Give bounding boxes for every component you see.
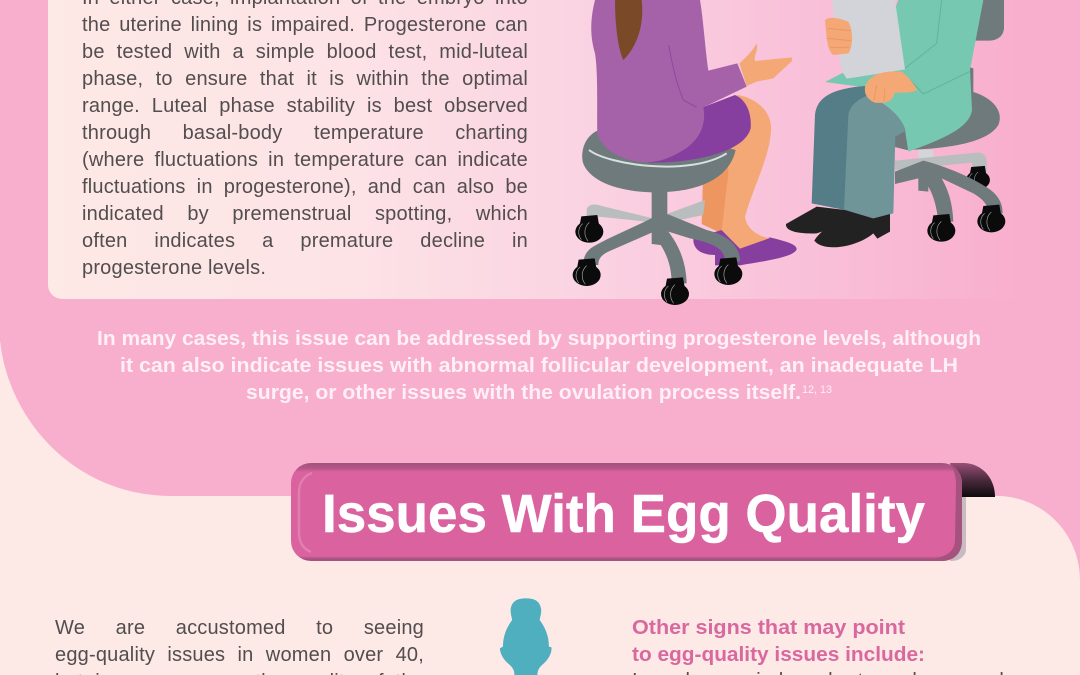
- heading: other signs: to egg-quality issues include:: [632, 644, 925, 666]
- text block: progesterone testing: progesterone levels.: [82, 257, 266, 279]
- text block: progesterone testing: often indicates a premature decline in: [82, 230, 528, 252]
- callout: progesterone summary: In many cases, this issue can be addressed by supporting progesterone levels, although: [97, 328, 981, 350]
- callout: progesterone summary: surge, or other issues with the ovulation process itself.: [246, 382, 801, 404]
- patient legs and shoe: [693, 95, 797, 265]
- text block: progesterone testing: [82, 0, 528, 279]
- text block: progesterone testing: phase, to ensure that it is within the optimal: [82, 68, 528, 90]
- patient body: [591, 0, 792, 163]
- text block: egg quality intro: egg-quality issues in women over 40,: [55, 644, 424, 666]
- panel: progesterone text card: [48, 0, 931, 299]
- text block: progesterone testing: the uterine lining is impaired. Progesterone can: [82, 14, 528, 36]
- callout: progesterone summary: [97, 328, 981, 404]
- text block: progesterone testing: through basal-body temperature charting: [82, 122, 528, 144]
- stool base and casters: [573, 214, 742, 305]
- callout: progesterone summary: 12, 13: [802, 384, 832, 396]
- text block: egg quality intro: We are accustomed to seeing: [55, 617, 424, 639]
- heading banner: Issues With Egg Quality: Issues With Egg Quality: [322, 484, 925, 544]
- doctor's chair: [893, 0, 1005, 242]
- callout: progesterone summary: it can also indicate issues with abnormal follicular development, an inadequate LH: [120, 355, 958, 377]
- text block: progesterone testing: range. Luteal phase stability is best observed: [82, 95, 528, 117]
- patient's stool: [575, 131, 736, 243]
- text block: progesterone testing: (where fluctuations in temperature can indicate: [82, 149, 528, 171]
- heading: other signs: Other signs that may point: [632, 617, 905, 639]
- text block: progesterone testing: indicated by premenstrual spotting, which: [82, 203, 528, 225]
- illustration: patient and doctor consultation: [572, 0, 1006, 305]
- text block: progesterone testing: be tested with a simple blood test, mid-luteal: [82, 41, 528, 63]
- doctor: [786, 0, 983, 247]
- text block: progesterone testing: fluctuations in progesterone), and can also be: [82, 176, 528, 198]
- text block: egg quality intro: [55, 617, 424, 675]
